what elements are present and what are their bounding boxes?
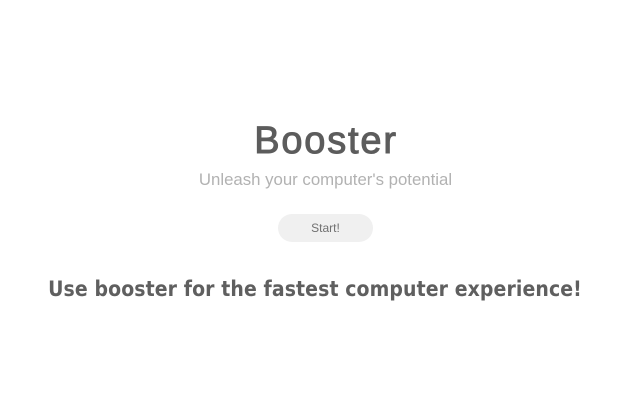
- start button: [278, 214, 373, 242]
- title: Booster: [254, 120, 398, 162]
- subtitle: Unleash your computer's potential: [199, 170, 452, 189]
- start button: Start!: [311, 221, 340, 235]
- tagline: Use booster for the fastest computer experience!: [48, 277, 582, 301]
